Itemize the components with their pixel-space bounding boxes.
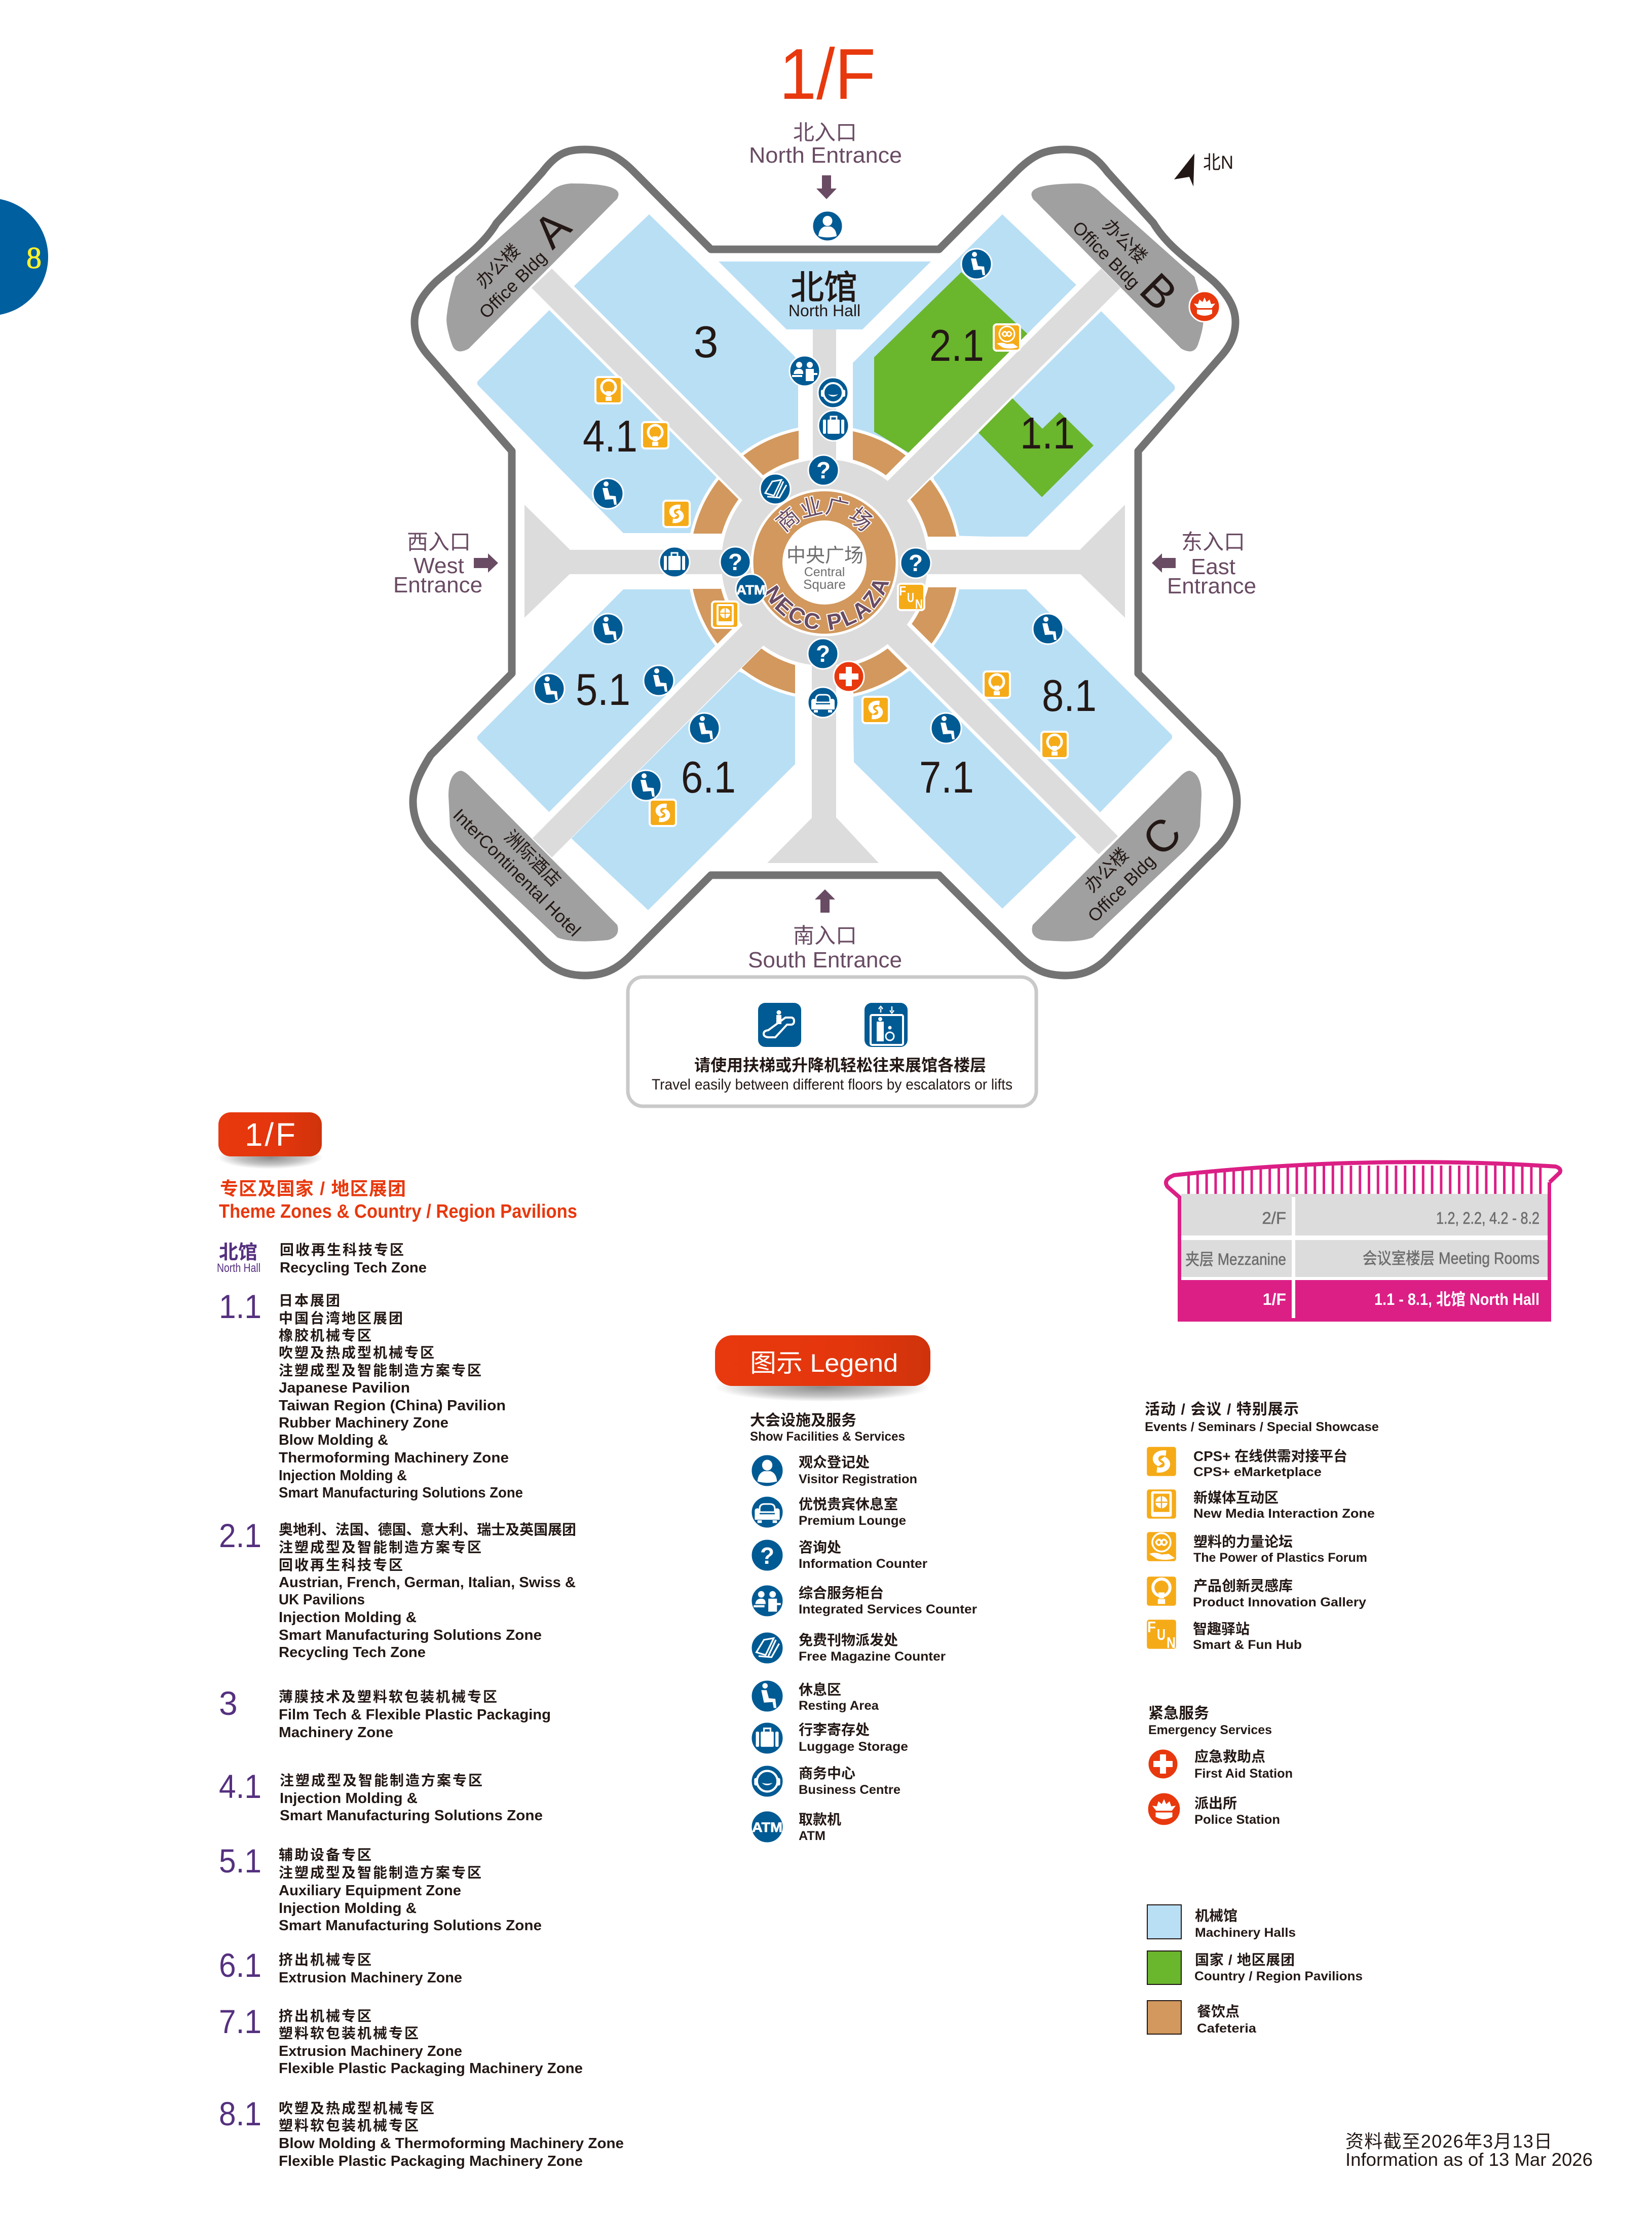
integrated services counter (751, 1585, 977, 1617)
free magazine counter: Free Magazine Counter (799, 1649, 946, 1664)
floor: 2/F (1181, 1194, 1548, 1235)
new media interaction zone: 新媒体互动区 (1193, 1490, 1279, 1506)
map icons: events: U (907, 590, 914, 605)
zone: 5.1: Smart Manufacturing Solutions Zone (279, 1918, 542, 1934)
south entrance (748, 889, 902, 972)
hall: north hall (719, 261, 931, 329)
free magazine counter: 免费刊物派发处 (799, 1632, 898, 1648)
cafeteria ring (689, 427, 960, 698)
information counter (751, 1539, 927, 1571)
smart and fun hub: F (1147, 1618, 1156, 1636)
zone: 4.1 (219, 1768, 543, 1824)
free magazine counter (751, 1632, 946, 1664)
floor: mezzanine: 夹层 Mezzanine (1185, 1250, 1286, 1268)
cps+ emarketplace (1146, 1446, 1347, 1479)
footer note: Information as of 13 Mar 2026 (1345, 2149, 1593, 2170)
zone: 8.1: 8.1 (219, 2095, 261, 2132)
atm (751, 1811, 841, 1843)
map icons: events (595, 324, 1068, 826)
zone: 3: Machinery Zone (279, 1724, 393, 1741)
zone: 1.1: Rubber Machinery Zone (279, 1415, 448, 1431)
police station: 派出所 (1194, 1795, 1237, 1811)
new media interaction zone (1146, 1488, 1375, 1521)
premium lounge: Premium Lounge (799, 1514, 906, 1528)
page tab (0, 198, 48, 316)
legend: events (1145, 1401, 1379, 1652)
hall labels: 北馆 (791, 269, 857, 306)
zone: 6.1 (219, 1946, 462, 1986)
country region pavilions: 国家 / 地区展团 (1195, 1952, 1295, 1968)
zone: 8.1: 吹塑及热成型机械专区 (279, 2100, 436, 2116)
pavilion: 1.1 green (979, 398, 1094, 497)
legend: emergency services (1147, 1705, 1293, 1827)
integrated services counter: Integrated Services Counter (799, 1602, 977, 1617)
floor: 1/F: 1/F (1263, 1290, 1286, 1308)
zone: 2.1: 奥地利、法国、德国、意大利、瑞士及英国展团 (279, 1522, 578, 1537)
central plaza: 中央广场 (786, 545, 863, 567)
badge: legend (715, 1335, 930, 1402)
country region pavilions: Country / Region Pavilions (1194, 1969, 1363, 1983)
map icons: information counters: ? (728, 549, 742, 575)
first aid station: First Aid Station (1194, 1767, 1293, 1781)
icon: first aid (834, 661, 864, 692)
machinery halls: Machinery Halls (1195, 1926, 1296, 1940)
resting area: 休息区 (799, 1682, 841, 1698)
roof columns (1187, 1166, 1543, 1196)
police station (1147, 1792, 1280, 1827)
east entrance: East (1191, 554, 1235, 579)
visitor registration: 观众登记处 (799, 1454, 870, 1470)
cafeteria: 餐饮点 (1197, 2004, 1240, 2019)
first aid station: 应急救助点 (1194, 1749, 1265, 1765)
the power of plastics forum: The Power of Plastics Forum (1193, 1551, 1367, 1565)
premium lounge (751, 1496, 906, 1528)
map icons: events: N (915, 596, 923, 612)
zone: 2.1: 注塑成型及智能制造方案专区 (279, 1540, 483, 1555)
zone: 2.1 (219, 1517, 578, 1661)
police station: Police Station (1194, 1813, 1280, 1827)
legend: emergency services: 紧急服务 (1148, 1705, 1209, 1722)
roof (1166, 1162, 1560, 1198)
zone: 3: 薄膜技术及塑料软包装机械专区 (279, 1689, 499, 1705)
information counter: 咨询处 (799, 1540, 841, 1555)
integrated services counter: 综合服务柜台 (799, 1585, 884, 1601)
zone: north hall: Recycling Tech Zone (280, 1260, 427, 1276)
zone: 1.1 (219, 1288, 523, 1501)
zone: 2.1: Injection Molding & (279, 1609, 417, 1626)
central plaza: NECC PLAZA (765, 580, 891, 631)
business centre (751, 1765, 900, 1797)
hall labels: 8.1 (1042, 670, 1097, 721)
central plaza: Central (804, 565, 845, 579)
zone: 1.1: Injection Molding & (279, 1468, 407, 1484)
floor: mezzanine: 会议室楼层 Meeting Rooms (1363, 1249, 1540, 1267)
arrow: east (1152, 553, 1176, 573)
zone: 7.1 (219, 2003, 583, 2077)
legend: show facilities: 大会设施及服务 (750, 1412, 856, 1429)
arrow: west (474, 553, 498, 573)
compass (1174, 152, 1233, 186)
legend: show facilities: Show Facilities & Services (750, 1430, 905, 1444)
zone: 2.1: Recycling Tech Zone (279, 1644, 426, 1661)
smart and fun hub: N (1167, 1634, 1176, 1651)
south entrance: South Entrance (748, 948, 902, 972)
zone: 1.1: 吹塑及热成型机械专区 (279, 1345, 436, 1361)
zone: 1.1: Thermoforming Machinery Zone (279, 1450, 509, 1466)
west entrance (393, 530, 498, 597)
badge: 1/F (217, 1112, 323, 1169)
zone: 3: Film Tech & Flexible Plastic Packaging (279, 1707, 551, 1723)
heading: theme zones: Theme Zones & Country / Region Pavilions (219, 1201, 577, 1222)
icon: atm (736, 574, 766, 605)
zone: 1.1: Taiwan Region (China) Pavilion (279, 1398, 506, 1414)
office building C (1032, 771, 1202, 942)
zone: 7.1: Extrusion Machinery Zone (279, 2043, 462, 2059)
west entrance hall (524, 505, 570, 618)
zone: 2.1: Austrian, French, German, Italian, Swiss & (279, 1574, 576, 1591)
legend: events: Events / Seminars / Special Showcase (1145, 1420, 1379, 1434)
zone: 8.1: Flexible Plastic Packaging Machinery Zone (279, 2153, 583, 2169)
zone: 1.1: Japanese Pavilion (279, 1380, 410, 1396)
office building B: B (1131, 264, 1187, 320)
zone: 5.1: 辅助设备专区 (279, 1847, 373, 1863)
legend: area colours (1147, 1905, 1363, 2036)
title: 1/F (779, 34, 876, 115)
zone: 6.1: 6.1 (219, 1946, 261, 1984)
arrow: south (815, 889, 835, 913)
west entrance: West (414, 553, 464, 578)
machinery halls (1147, 1905, 1296, 1940)
zone: north hall: 回收再生科技专区 (280, 1242, 405, 1258)
information counter: Information Counter (799, 1557, 927, 1571)
office building A (446, 183, 619, 351)
zone: 2.1: Smart Manufacturing Solutions Zone (279, 1627, 542, 1643)
west entrance: 西入口 (407, 530, 471, 554)
cps+ emarketplace: CPS+ eMarketplace (1193, 1465, 1322, 1479)
office building C: C (1133, 807, 1191, 866)
east entrance (1152, 530, 1256, 598)
hall: 6.1 (571, 671, 796, 910)
page tab: 8 (26, 241, 42, 275)
hall labels: 3 (694, 317, 718, 367)
atm: 取款机 (799, 1812, 841, 1827)
callout: escalators and lifts (628, 977, 1036, 1106)
hall: 3 (573, 214, 798, 474)
smart and fun hub: Smart & Fun Hub (1193, 1638, 1302, 1652)
office building C: 办公楼 (1081, 844, 1133, 896)
office building B: 办公楼 (1099, 215, 1151, 267)
business centre: Business Centre (799, 1783, 900, 1797)
zone: 4.1: 4.1 (219, 1768, 261, 1805)
compass: 北N (1203, 152, 1233, 173)
cps+ emarketplace: CPS+ 在线供需对接平台 (1193, 1448, 1347, 1464)
zone: 7.1: 7.1 (219, 2003, 261, 2040)
zone: 2.1: UK Pavilions (279, 1592, 365, 1608)
icon: police (1189, 291, 1220, 322)
hall labels (576, 269, 1097, 802)
zone: 5.1: 注塑成型及智能制造方案专区 (279, 1865, 483, 1881)
zone: 7.1: 挤出机械专区 (279, 2008, 373, 2024)
zone: 5.1: Auxiliary Equipment Zone (279, 1883, 461, 1899)
office building A: Office Bldg (475, 247, 550, 322)
outer wall (413, 149, 1237, 975)
visitor registration (751, 1454, 917, 1487)
hall labels: 4.1 (583, 411, 637, 461)
map icons: information counters: ? (909, 550, 923, 576)
zone: 1.1: Blow Molding & (279, 1432, 388, 1448)
intercontinental hotel: 洲际酒店 (500, 827, 565, 891)
legend: emergency services: Emergency Services (1148, 1723, 1272, 1737)
footer note: 资料截至2026年3月13日 (1345, 2131, 1552, 2152)
legend: show facilities (750, 1412, 977, 1843)
office building A: A (524, 201, 580, 257)
first aid station (1148, 1749, 1293, 1781)
hall labels: North Hall (789, 302, 860, 320)
south entrance: 南入口 (793, 924, 857, 948)
zone: 2.1: 2.1 (219, 1517, 261, 1554)
heading: theme zones (219, 1178, 577, 1222)
zone: 5.1 (219, 1842, 542, 1934)
resting area: Resting Area (799, 1699, 879, 1713)
floor: 1/F (1178, 1280, 1551, 1322)
smart and fun hub: 智趣驿站 (1193, 1621, 1250, 1637)
legend: events: 活动 / 会议 / 特别展示 (1145, 1401, 1299, 1418)
icon: escalator (758, 1003, 801, 1047)
map icons: information counters (720, 455, 931, 669)
zone: 7.1: 塑料软包装机械专区 (279, 2025, 420, 2041)
badge: legend: 图示 Legend (750, 1349, 898, 1377)
hall: 5.1 (477, 589, 720, 814)
premium lounge: 优悦贵宾休息室 (799, 1496, 898, 1512)
smart and fun hub (1146, 1618, 1302, 1652)
resting area (751, 1680, 879, 1713)
icon: lift (865, 1003, 908, 1047)
floor: mezzanine (1181, 1235, 1548, 1281)
badge: 1/F: 1/F (245, 1116, 295, 1153)
map icons: information counters: ? (816, 457, 831, 483)
floor plan map (409, 146, 1241, 979)
office building A: 办公楼 (472, 240, 524, 292)
the power of plastics forum: 塑料的力量论坛 (1193, 1534, 1293, 1550)
hall labels: 7.1 (919, 752, 974, 802)
business centre: 商务中心 (799, 1766, 855, 1781)
floor: 2/F: 2/F (1262, 1209, 1286, 1227)
hall: 4.1 (477, 309, 717, 533)
hall: 7.1 (853, 670, 1076, 909)
intercontinental hotel (448, 771, 618, 942)
east entrance hall (1080, 505, 1125, 618)
north entrance: 北入口 (793, 121, 857, 144)
south entrance hall (767, 818, 879, 863)
icon: atm: ATM (736, 582, 766, 597)
cafeteria: Cafeteria (1197, 2021, 1257, 2036)
zone: 8.1: Blow Molding & Thermoforming Machinery Zone (279, 2135, 624, 2152)
zone: 8.1: 塑料软包装机械专区 (279, 2118, 420, 2133)
white corridors (529, 266, 1120, 856)
the power of plastics forum (1146, 1531, 1367, 1565)
footer note (1345, 2131, 1593, 2170)
zone: 1.1: 橡胶机械专区 (279, 1328, 373, 1343)
map icons: events: F (899, 583, 906, 598)
office building C: Office Bldg (1084, 851, 1159, 926)
east entrance: 东入口 (1181, 530, 1245, 554)
zone: 3: 3 (219, 1684, 238, 1722)
hall: 1.1 side (933, 311, 1175, 538)
zone: 1.1: 日本展团 (279, 1293, 342, 1308)
zone: 8.1 (219, 2095, 624, 2169)
intercontinental hotel: InterContinental Hotel (449, 805, 584, 941)
new media interaction zone: New Media Interaction Zone (1193, 1507, 1375, 1521)
map icons: services (534, 211, 1063, 801)
zone: 6.1: 挤出机械专区 (279, 1952, 373, 1968)
zone: north hall: 北馆 (219, 1242, 257, 1263)
atm: ATM (799, 1829, 825, 1843)
hall labels: 6.1 (681, 752, 736, 802)
hall labels: 2.1 (929, 320, 984, 370)
product innovation gallery: Product Innovation Gallery (1193, 1595, 1366, 1609)
hall: 8.1 (933, 589, 1172, 814)
hall labels: 1.1 (1020, 408, 1075, 458)
gray walkways (532, 269, 1120, 857)
central plaza: 商业广场 (773, 495, 874, 534)
zone: 5.1: Injection Molding & (279, 1900, 417, 1917)
zone: 2.1: 回收再生科技专区 (279, 1557, 404, 1573)
zone: 1.1: 中国台湾地区展团 (279, 1310, 404, 1326)
cafeteria (1147, 2001, 1257, 2036)
hall labels: 5.1 (576, 664, 630, 715)
machinery halls: 机械馆 (1195, 1908, 1237, 1924)
luggage storage: Luggage Storage (799, 1740, 908, 1754)
zone: 7.1: Flexible Plastic Packaging Machinery Zone (279, 2060, 583, 2077)
hall: 2.1 side (853, 214, 1079, 466)
central plaza: Square (803, 577, 846, 592)
east entrance: Entrance (1167, 574, 1256, 598)
visitor registration: Visitor Registration (799, 1472, 917, 1486)
north entrance (749, 121, 902, 199)
product innovation gallery (1146, 1575, 1366, 1609)
central plaza (751, 489, 898, 636)
north entrance: North Entrance (749, 143, 902, 168)
zone: north hall: North Hall (217, 1261, 260, 1275)
information counter: ? (760, 1543, 774, 1569)
zone: 5.1: 5.1 (219, 1842, 261, 1880)
zone: 3 (219, 1684, 551, 1741)
floor: 2/F: 1.2, 2.2, 4.2 - 8.2 (1436, 1209, 1540, 1227)
luggage storage: 行李寄存处 (799, 1722, 870, 1738)
zone: 4.1: Smart Manufacturing Solutions Zone (280, 1808, 543, 1824)
callout: escalators and lifts: Travel easily between different floors by escalators or lifts (652, 1076, 1012, 1093)
product innovation gallery: 产品创新灵感库 (1193, 1578, 1293, 1594)
pavilion: 2.1 green (874, 272, 1030, 455)
concourse ring (720, 458, 929, 667)
callout: escalators and lifts: 请使用扶梯或升降机轻松往来展馆各楼层 (694, 1056, 986, 1074)
office building B: Office Bldg (1069, 217, 1144, 292)
smart and fun hub: U (1157, 1626, 1166, 1643)
office building B (1031, 183, 1204, 351)
floor: 1/F: 1.1 - 8.1, 北馆 North Hall (1374, 1290, 1540, 1308)
zone: 4.1: 注塑成型及智能制造方案专区 (280, 1773, 484, 1788)
building section diagram (1166, 1162, 1560, 1322)
luggage storage (751, 1722, 908, 1754)
zone: 1.1: 注塑成型及智能制造方案专区 (279, 1363, 483, 1378)
west entrance: Entrance (393, 573, 482, 597)
zone: 1.1: 1.1 (219, 1288, 261, 1325)
country region pavilions (1147, 1951, 1363, 1984)
map icons: information counters: ? (816, 641, 830, 667)
arrow: north (816, 175, 837, 199)
atm: ATM (752, 1820, 782, 1835)
heading: theme zones: 专区及国家 / 地区展团 (220, 1178, 406, 1199)
zone: 4.1: Injection Molding & (280, 1790, 418, 1807)
zone: 6.1: Extrusion Machinery Zone (279, 1970, 462, 1986)
zone: 1.1: Smart Manufacturing Solutions Zone (279, 1485, 523, 1501)
zone: north hall (217, 1242, 427, 1276)
